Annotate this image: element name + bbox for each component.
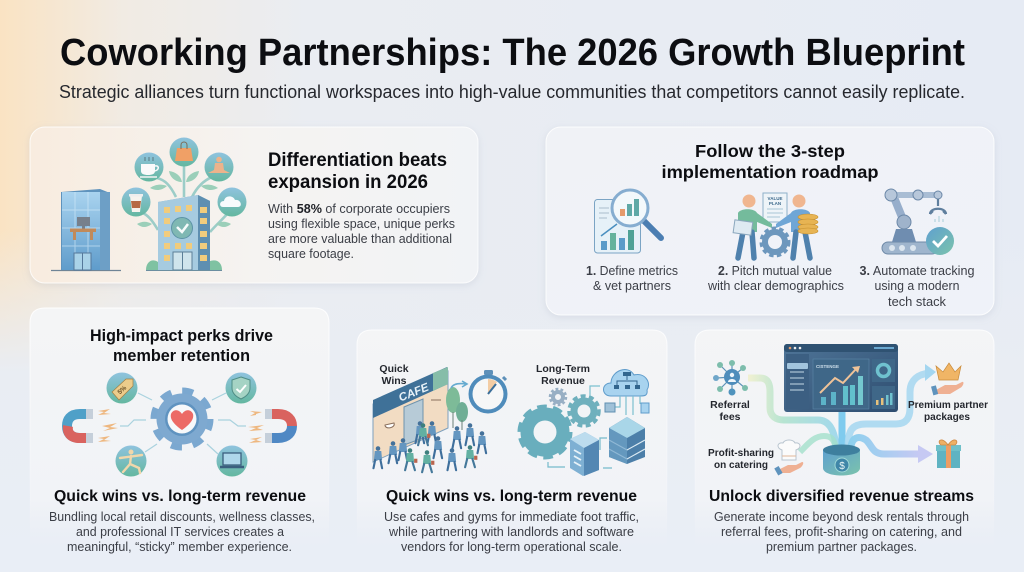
label: long-term revenue: Long-Term <box>536 363 590 375</box>
label: premium packages: packages <box>924 411 970 423</box>
label: referral fees: fees <box>719 411 741 423</box>
body text <box>268 201 455 261</box>
label: premium packages <box>908 399 988 423</box>
icon: cafe storefront <box>373 367 468 462</box>
heading: Differentiation beats <box>268 149 447 171</box>
icon: coin cup <box>823 444 860 476</box>
body text: are more valuable than additional <box>268 231 452 246</box>
icon: discount tag <box>106 372 138 404</box>
panel: differentiation <box>30 127 478 283</box>
body text: while partnering with landlords and software <box>388 524 634 539</box>
panel: perks <box>30 308 329 572</box>
label: profit sharing: Profit-sharing <box>708 447 774 459</box>
body text: meaningful, “sticky” member experience. <box>67 539 292 554</box>
subtitle: Strategic alliances turn functional workspaces into high-value communities that competitors cannot easily replicate. <box>59 81 965 102</box>
icon: coin cup: $ <box>839 461 845 472</box>
subheading: Quick wins vs. long-term revenue <box>54 488 306 505</box>
body text: Generate income beyond desk rentals through <box>714 509 969 524</box>
body text: Bundling local retail discounts, wellness classes, <box>49 509 315 524</box>
subheading: Quick wins vs. long-term revenue <box>386 488 637 505</box>
icon: partners handshake: PLAN <box>769 201 781 206</box>
label: quick wins: Quick <box>379 363 409 375</box>
arrowheads <box>918 364 936 463</box>
connector lines <box>120 393 246 454</box>
subheading: Unlock diversified revenue streams <box>709 488 974 505</box>
label: referral fees: Referral <box>710 399 750 411</box>
heading: implementation roadmap <box>662 162 878 182</box>
label: premium packages: Premium partner <box>908 399 988 411</box>
icon: shopping bag circle <box>170 138 198 166</box>
label: profit sharing <box>708 447 774 471</box>
icon: gift box <box>936 440 961 468</box>
icon: sparks <box>98 409 264 443</box>
dashboard window: CISTENGE <box>816 364 839 369</box>
label: quick wins <box>379 363 409 387</box>
body text: and professional IT services creates a <box>76 524 285 539</box>
panel: revenue streams <box>695 330 994 572</box>
step 2: with clear demographics <box>707 278 844 293</box>
body text: With 58% of corporate occupiers <box>268 201 450 216</box>
icon: stopwatch <box>468 370 508 414</box>
body text: referral fees, profit-sharing on catering, and <box>721 524 962 539</box>
title: Coworking Partnerships: The 2026 Growth Blueprint <box>60 32 965 74</box>
step 3: 3. Automate tracking <box>860 263 974 278</box>
flow streams <box>748 373 930 454</box>
heading <box>662 141 878 182</box>
body text: square footage. <box>268 246 354 261</box>
body text: premium partner packages. <box>766 539 917 554</box>
icon: chef hat on hand <box>774 440 803 475</box>
dashboard window <box>784 344 898 412</box>
icon: right magnet <box>265 409 292 443</box>
icon: referral network <box>713 360 748 396</box>
body text <box>49 509 315 554</box>
icon: metrics magnifier <box>594 190 661 253</box>
step 2: 2. Pitch mutual value <box>718 263 832 278</box>
heading: High-impact perks drive <box>90 327 273 345</box>
body text: vendors for long-term operational scale. <box>401 539 622 554</box>
icon: yoga <box>116 446 146 476</box>
panel: roadmap <box>546 127 994 315</box>
body text: using flexible space, unique perks <box>268 216 455 231</box>
label: long-term revenue <box>536 363 590 387</box>
icon: small tower <box>548 432 612 476</box>
icon: server stack <box>609 417 645 464</box>
step 2 <box>707 263 844 293</box>
icon: robot arm <box>882 189 954 255</box>
body text <box>714 509 969 554</box>
icon: heart gear <box>154 391 210 447</box>
heading <box>268 149 447 193</box>
icon: crown on hand <box>931 363 963 395</box>
heading: member retention <box>113 347 250 365</box>
body text: Use cafes and gyms for immediate foot traffic, <box>384 509 639 524</box>
icon: shield <box>226 372 256 404</box>
icon: partners handshake <box>733 193 818 258</box>
heading <box>90 327 273 365</box>
icon: meditation circle <box>204 152 234 182</box>
label: quick wins: Wins <box>382 375 407 387</box>
label: profit sharing: on catering <box>714 459 768 471</box>
icon: plain office building with desk <box>51 189 121 270</box>
icon: cafe storefront: CAFE <box>397 381 431 404</box>
step 1: 1. Define metrics <box>586 263 678 278</box>
label: referral fees <box>710 399 750 423</box>
heading: Follow the 3-step <box>695 141 845 161</box>
icon: partner tree building <box>137 166 231 270</box>
step 3: using a modern <box>874 278 960 293</box>
icon: laptop <box>216 446 248 476</box>
icon: partners handshake: VALUE <box>768 196 782 201</box>
icon: discount tag: 5% <box>116 384 128 396</box>
icon: left magnet <box>67 409 93 443</box>
step 3: tech stack <box>888 294 946 309</box>
label: long-term revenue: Revenue <box>541 375 585 387</box>
heading: expansion in 2026 <box>268 171 428 193</box>
icon: crowd <box>373 421 486 472</box>
icon: takeaway cup circle <box>122 188 150 216</box>
step 1: & vet partners <box>593 278 671 293</box>
body text <box>384 509 639 554</box>
step 1 <box>586 263 678 293</box>
panel: quick wins <box>357 330 667 572</box>
icon: cloud circle <box>218 188 246 216</box>
icon: gears <box>520 389 599 457</box>
step 3 <box>860 263 974 309</box>
icon: coffee cup circle <box>134 152 164 182</box>
icon: cloud network <box>590 370 649 415</box>
